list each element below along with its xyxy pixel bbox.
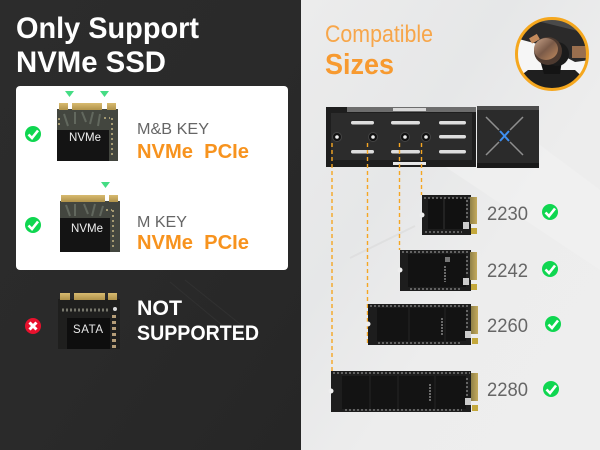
chip: M&B key NVMe bbox=[57, 103, 118, 161]
M key notch marker bbox=[101, 182, 110, 188]
icon: check M key bbox=[25, 217, 41, 233]
icon: check M&B key bbox=[25, 126, 41, 142]
label: 2242: 2242 bbox=[487, 261, 528, 282]
heading: compatible sizes: Sizes bbox=[325, 49, 394, 81]
ssd 2260 bbox=[366, 304, 478, 345]
chip: SATA not supported: SATA bbox=[73, 324, 103, 336]
panel: dark left background bbox=[0, 0, 301, 450]
chip: M key NVMe bbox=[60, 195, 120, 252]
label: not supported: SUPPORTED bbox=[137, 322, 259, 345]
label: M key: NVMe PCIe bbox=[137, 232, 249, 254]
icon: red cross bbox=[25, 318, 41, 334]
icon: check 2260 bbox=[545, 316, 561, 332]
icon: check 2280 bbox=[543, 381, 559, 397]
ssd 2242 bbox=[398, 250, 477, 291]
ssd 2230 bbox=[420, 195, 477, 235]
label: M&B key: M&B KEY bbox=[137, 121, 209, 138]
ssd 2280 bbox=[328, 371, 478, 412]
icon: screw detail circle bbox=[515, 15, 590, 92]
panel: supported key types bbox=[16, 86, 288, 270]
enclosure: slide tray bbox=[326, 107, 476, 167]
title: Only Support bbox=[16, 12, 199, 45]
chip: SATA not supported bbox=[58, 293, 120, 349]
label: M key bbox=[137, 214, 249, 254]
label: 2260: 2260 bbox=[487, 316, 528, 337]
label: M key: M KEY bbox=[137, 214, 187, 231]
M&B key notch markers bbox=[65, 91, 109, 97]
label: M&B key bbox=[137, 121, 249, 163]
icon: check 2230 bbox=[542, 204, 558, 220]
panel: light right background bbox=[301, 0, 600, 450]
label: not supported: NOT bbox=[137, 297, 182, 320]
chip: M key NVMe: NVMe bbox=[71, 223, 103, 235]
dashed guide lines bbox=[332, 143, 422, 371]
heading: compatible sizes: Compatible bbox=[325, 21, 433, 48]
label: 2230: 2230 bbox=[487, 204, 528, 225]
label: M&B key: NVMe PCIe bbox=[137, 141, 249, 163]
title: NVMe SSD bbox=[16, 46, 166, 79]
label: not supported bbox=[137, 297, 259, 345]
enclosure: head with X logo bbox=[477, 106, 539, 168]
icon: check 2242 bbox=[542, 261, 558, 277]
label: 2280: 2280 bbox=[487, 380, 528, 401]
heading: compatible sizes bbox=[325, 21, 433, 81]
chip: M&B key NVMe: NVMe bbox=[69, 132, 101, 144]
title bbox=[16, 12, 199, 79]
